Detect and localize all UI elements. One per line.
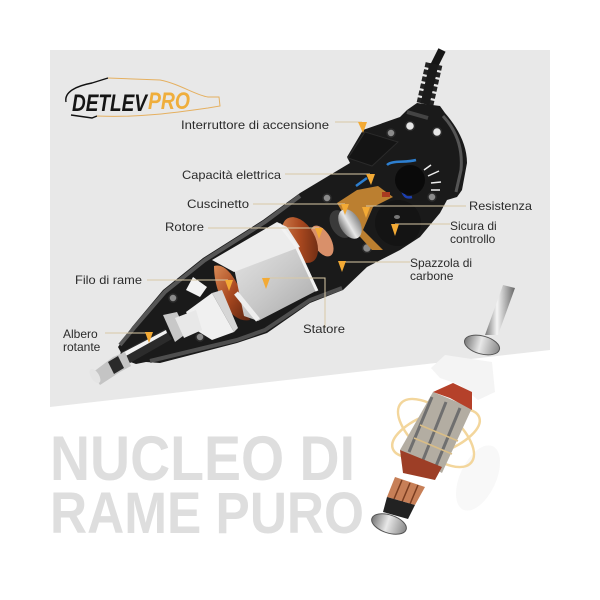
shell rim highlight bbox=[120, 196, 300, 345]
rotary tool: black shell bbox=[118, 103, 467, 364]
label: Cuscinetto: Cuscinetto bbox=[187, 197, 249, 211]
circuit board bbox=[337, 186, 393, 250]
armature: steel core bbox=[400, 392, 472, 473]
logo: Detlev Pro: DETLEV bbox=[72, 90, 149, 117]
bearing and shaft bbox=[120, 310, 202, 363]
label: Capacità elettrica: Capacità elettrica bbox=[182, 168, 281, 182]
logo: Detlev Pro: PRO bbox=[148, 88, 190, 115]
chuck tip bbox=[87, 352, 131, 385]
label: Filo di rame: Filo di rame bbox=[75, 273, 142, 287]
bearing bbox=[325, 205, 367, 243]
motor dark cap bbox=[395, 165, 425, 195]
label: Resistenza: Resistenza bbox=[469, 199, 532, 213]
armature: copper top winding bbox=[433, 383, 472, 410]
panel: grey background bbox=[50, 50, 550, 407]
red component bbox=[382, 192, 390, 197]
leader lines bbox=[105, 122, 466, 333]
label: Albero rotante: Albero bbox=[63, 327, 98, 341]
label: Sicura di controllo: Sicura di bbox=[450, 219, 497, 233]
armature: lower shaft bbox=[383, 497, 415, 519]
armature: lower bearing bbox=[369, 510, 409, 538]
armature: white fan bbox=[431, 355, 495, 400]
speed control dial bbox=[375, 200, 421, 246]
copper windings bbox=[214, 211, 325, 320]
armature: upper bearing bbox=[462, 332, 502, 358]
screws bbox=[169, 122, 442, 341]
label: Albero rotante: rotante bbox=[63, 340, 101, 354]
armature: commutator bbox=[387, 477, 425, 505]
armature: copper bottom winding bbox=[400, 450, 442, 480]
label: Spazzola di carbone: Spazzola di bbox=[410, 256, 472, 270]
copper commutator bbox=[306, 222, 338, 260]
white fan bbox=[186, 277, 238, 340]
armature: gold rings bbox=[386, 387, 486, 479]
heading: NUCLEO DI: NUCLEO DI bbox=[50, 424, 355, 494]
stator bbox=[212, 222, 317, 321]
armature: shaft bbox=[485, 285, 515, 335]
logo: Detlev Pro bbox=[66, 78, 220, 118]
power cord bbox=[425, 50, 442, 104]
label: Statore: Statore bbox=[303, 322, 345, 336]
label: Interruttore di accensione: Interruttore di accensione bbox=[181, 118, 329, 132]
armature: rotor bbox=[369, 285, 515, 538]
label: Spazzola di carbone: carbone bbox=[410, 269, 454, 283]
label: Rotore: Rotore bbox=[165, 220, 204, 234]
label: Sicura di controllo: controllo bbox=[450, 232, 496, 246]
blue wires bbox=[356, 160, 416, 197]
heading: RAME PURO: RAME PURO bbox=[50, 481, 364, 546]
vent slots bbox=[424, 165, 441, 190]
armature shadow bbox=[447, 439, 509, 517]
switch block bbox=[348, 132, 398, 166]
orange markers bbox=[145, 122, 399, 343]
